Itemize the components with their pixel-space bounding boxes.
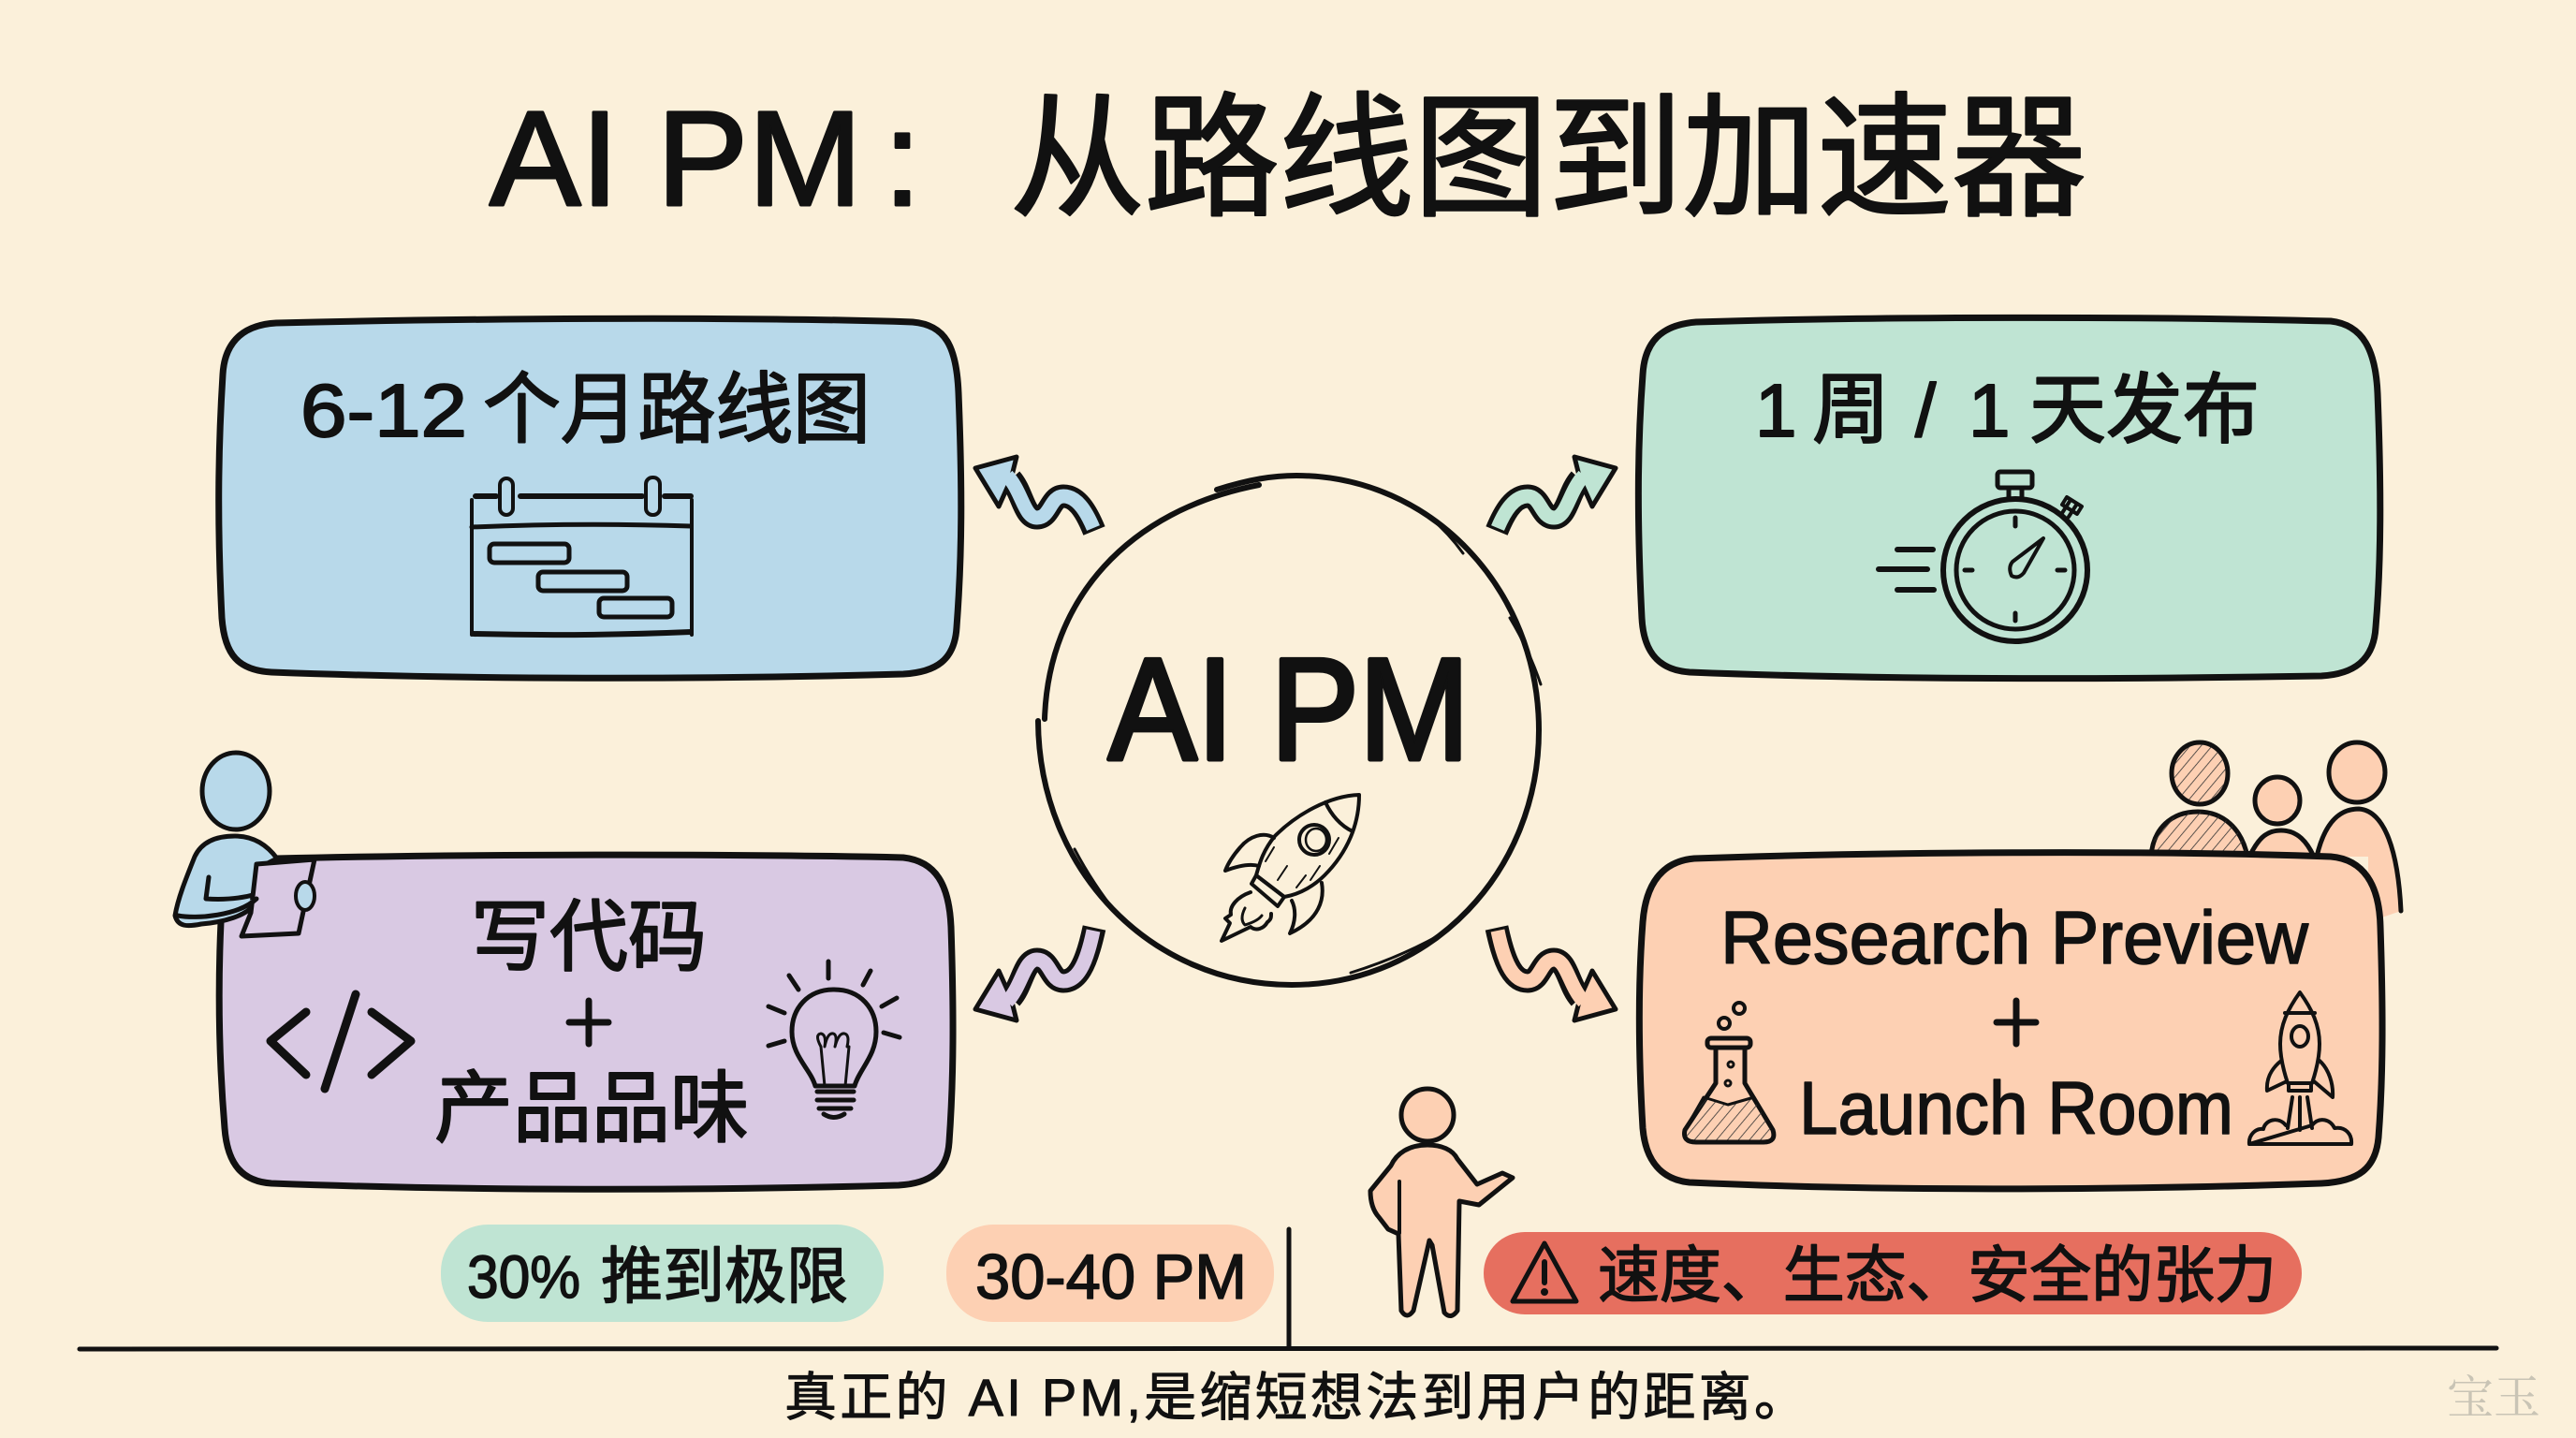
icon: lightbulb	[768, 961, 900, 1118]
arrow: to launch panel	[1497, 928, 1616, 1020]
timeline: divider	[80, 1229, 2496, 1349]
text: write code: 写代码	[471, 893, 707, 981]
arrow: to code panel	[975, 928, 1094, 1020]
pill: 30 percent: 30%	[467, 1243, 580, 1311]
heading: 1 week / 1 day release: /	[1915, 369, 1937, 452]
arrow: to release panel	[1497, 457, 1616, 531]
icon: gantt calendar	[472, 477, 692, 635]
figure: team of three	[2151, 742, 2401, 922]
heading: 1 week / 1 day release	[1755, 366, 2260, 453]
pill: 30-40 PM	[946, 1225, 1274, 1322]
watermark: 宝玉	[2447, 1360, 2540, 1428]
panel: 6-12 month roadmap	[219, 318, 961, 678]
text: tension: 速度、生态、安全的张力	[1598, 1240, 2276, 1310]
title: AI PM	[490, 83, 862, 234]
heading: 1 week / 1 day release: 周	[1812, 366, 1890, 453]
icon: launching rocket	[2249, 992, 2351, 1144]
icon: plus	[569, 1001, 608, 1044]
text: product taste: 产品品味	[434, 1064, 749, 1152]
icon: warning triangle	[1513, 1243, 1576, 1301]
figure: standing person	[1370, 1089, 1513, 1316]
icon: plus	[1997, 1001, 2036, 1044]
heading: 1 week / 1 day release: 1	[1969, 369, 2011, 452]
heading: 6-12 month roadmap: 个月路线图	[483, 366, 871, 453]
footer text: 真正的 AI PM,是缩短想法到用户的距离。	[784, 1368, 1807, 1427]
heading: 1 week / 1 day release: 1	[1755, 369, 1797, 452]
title: :	[884, 83, 921, 234]
arrow: to roadmap panel	[975, 457, 1094, 531]
heading: 1 week / 1 day release: 天发布	[2029, 368, 2260, 453]
pill: 30 percent: 推到极限	[601, 1241, 848, 1311]
icon: stopwatch	[1879, 472, 2087, 641]
icon: rocket	[1222, 795, 1359, 941]
text: research preview: Research Preview	[1720, 896, 2308, 979]
heading: 6-12 month roadmap: 6-12	[300, 369, 467, 452]
icon: flask	[1685, 1003, 1774, 1142]
title: 从路线图到加速器	[1010, 83, 2086, 234]
icon: code brackets	[271, 994, 411, 1089]
pill: 30-40 PM: 30-40 PM	[975, 1241, 1247, 1313]
text: launch room: Launch Room	[1799, 1066, 2233, 1150]
pill: tension warning	[1484, 1232, 2302, 1314]
panel: code plus product taste	[175, 753, 953, 1189]
circle: AI PM hub	[1038, 476, 1541, 985]
panel: 1 week / 1 day release	[1638, 317, 2380, 679]
panel: research preview plus launch room	[1639, 853, 2382, 1189]
figure: person with tablet	[175, 753, 315, 936]
pill: 30 percent	[441, 1225, 884, 1322]
title	[490, 83, 2086, 234]
text: AI PM: AI PM	[1108, 628, 1470, 790]
heading: 6-12 month roadmap	[300, 366, 871, 453]
